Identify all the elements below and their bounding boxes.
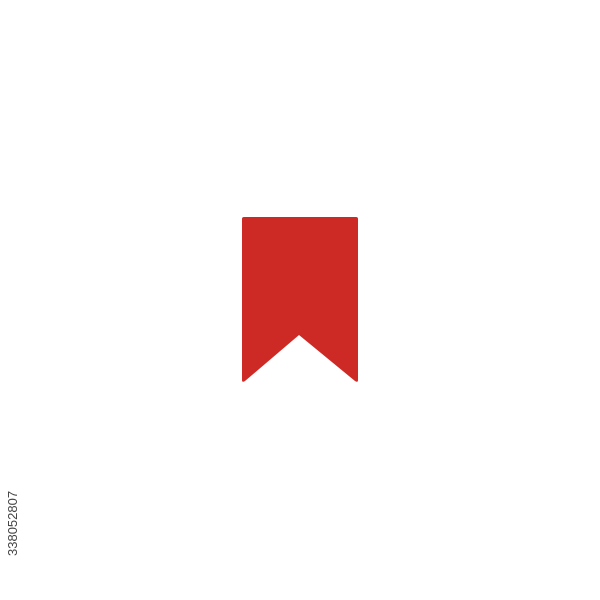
stock id text: 338052807	[5, 491, 20, 556]
